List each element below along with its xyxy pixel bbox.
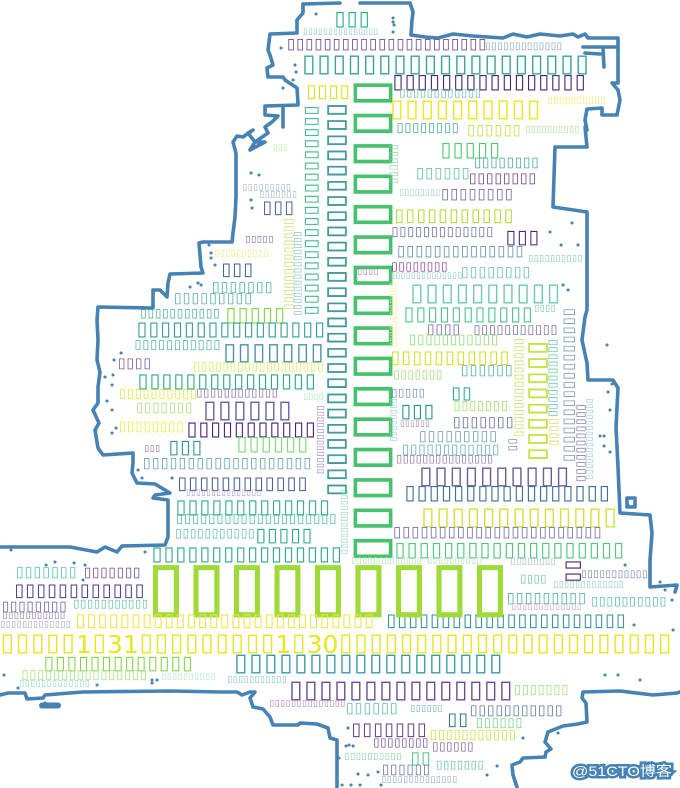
left middle words: ▯▯▯▯▯▯▯▯▯▯▯▯▯▯▯ <box>186 487 262 497</box>
central vertical words: ▯▯▯▯▯▯▯▯ <box>388 398 398 442</box>
upper and right words: ▯▯▯▯▯▯▯▯ <box>391 259 448 273</box>
left middle words: ▯▯▯▯▯▯▯▯▯▯▯▯▯▯▯▯ <box>136 317 326 340</box>
left middle words: ▯▯▯▯▯▯▯ <box>259 190 297 200</box>
upper and right words: ▯▯▯▯▯▯▯▯▯▯▯▯ <box>399 86 482 99</box>
central vertical words: ▯▯▯▯▯▯▯▯▯▯▯▯▯▯▯▯▯▯▯▯▯▯▯▯▯▯ <box>324 103 354 498</box>
upper and right words: ▯▯▯▯▯▯▯▯▯▯▯▯▯▯▯ <box>396 452 494 465</box>
upper and right words: ▯▯▯▯▯▯▯▯▯ <box>419 429 498 445</box>
left middle words: ▯▯▯ <box>262 197 295 218</box>
upper and right words: ▯▯▯▯▯ <box>391 386 426 399</box>
upper and right words: ▯▯▯▯▯▯▯▯ <box>510 556 556 567</box>
upper and right words: ▯▯▯▯▯▯▯ <box>453 415 515 431</box>
central vertical words: ▯▯▯▯▯▯▯▯ <box>526 341 554 463</box>
word: date line with digits: 31 <box>107 630 139 659</box>
lower words: ▯▯▯▯▯▯▯▯▯▯▯▯▯▯▯▯ <box>151 542 343 565</box>
upper and right words: ▯▯▯▯▯▯▯▯▯▯▯▯▯ <box>511 602 582 612</box>
upper and right words: ▯▯▯▯▯▯▯▯▯▯ <box>528 254 583 264</box>
upper and right words: ▯▯▯▯▯▯▯▯▯▯▯▯▯▯▯▯▯▯▯ <box>394 537 625 561</box>
left middle words: ▯▯▯▯▯▯▯▯▯▯▯ <box>140 306 220 320</box>
upper and right words: ▯▯▯▯▯▯▯▯▯▯▯▯▯▯▯ <box>303 26 379 36</box>
upper and right words: ▯▯▯▯▯▯▯▯▯▯▯▯▯ <box>485 41 563 52</box>
lower words: ▯▯▯▯▯▯ <box>432 739 474 753</box>
central vertical words: ▯▯▯▯▯▯▯▯▯▯▯ <box>575 404 589 482</box>
lower words: ▯▯▯▯▯▯▯▯▯▯ <box>161 672 216 682</box>
left middle words: ▯▯▯▯▯▯▯ <box>212 280 274 296</box>
upper and right words: ▯▯▯▯▯▯▯▯▯▯▯▯ <box>402 442 500 458</box>
upper and right words: ▯▯▯▯▯▯▯▯▯ <box>507 590 587 607</box>
lower words: ▯▯▯▯▯▯▯▯▯▯▯▯ <box>14 580 146 601</box>
lower words: ▯▯▯▯▯▯▯▯▯▯▯▯▯ <box>43 652 193 674</box>
lower words: ▯▯▯▯▯▯▯▯▯▯▯▯▯ <box>19 679 90 689</box>
left middle words: ▯▯▯ <box>221 259 254 280</box>
left middle words: ▯▯▯▯▯▯▯▯▯▯ <box>119 387 198 402</box>
upper and right words: ▯▯▯▯ <box>520 572 547 585</box>
central vertical words: ▯▯▯▯▯▯ <box>388 144 401 184</box>
upper and right words: ▯▯▯ <box>505 226 540 248</box>
left middle words: ▯▯▯ <box>144 444 161 454</box>
upper and right words: ▯▯▯▯▯▯▯▯▯▯▯▯▯ <box>351 556 422 566</box>
left middle words: ▯▯▯▯▯▯▯▯▯▯▯▯▯▯▯▯▯▯▯ <box>143 455 312 472</box>
central vertical words: ▯▯▯▯▯▯▯▯▯▯▯▯▯▯▯ <box>584 398 594 480</box>
upper and right words: ▯▯▯▯▯▯▯▯▯▯▯▯▯▯▯▯▯▯▯▯▯▯▯ <box>393 522 602 540</box>
upper and right words: ▯▯▯▯▯▯▯▯▯▯▯ <box>403 302 534 325</box>
lower words: ▯▯▯▯▯▯▯ <box>514 683 569 698</box>
upper and right words: ▯▯▯▯▯▯▯▯▯▯▯ <box>473 322 558 337</box>
left middle words: ▯▯▯▯▯▯▯▯▯▯▯▯ <box>177 473 309 494</box>
lower words: ▯▯ <box>447 709 469 730</box>
lower words: ▯▯▯▯▯▯▯ <box>351 719 428 740</box>
upper and right words: ▯▯▯▯▯▯▯▯▯▯▯▯▯ <box>421 502 618 530</box>
upper and right words: ▯▯▯▯▯▯▯▯ <box>461 265 531 281</box>
word: largest vertical green: ▯▯▯▯▯▯▯▯▯▯▯▯▯▯▯▯ <box>348 79 406 565</box>
central vertical words: ▯▯▯▯ <box>548 418 562 447</box>
left middle words: ▯▯▯▯ <box>303 392 324 402</box>
left middle words: ▯▯▯▯▯ <box>255 524 313 546</box>
left middle words: ▯▯▯ <box>273 143 288 153</box>
lower words: ▯▯▯▯▯▯▯▯▯▯▯ <box>73 597 149 610</box>
central vertical words: ▯▯▯▯▯▯▯▯▯▯▯▯ <box>339 489 349 555</box>
upper and right words: ▯▯▯▯▯▯▯▯▯▯▯ <box>394 205 515 226</box>
left middle words: ▯▯▯ <box>168 436 203 458</box>
upper and right words: ▯▯▯▯▯▯▯▯▯▯ <box>390 94 542 122</box>
lower words: ▯▯▯▯▯▯▯▯▯▯▯▯▯ <box>0 620 71 630</box>
upper and right words <box>287 6 667 631</box>
upper and right words: ▯▯▯▯▯▯▯▯▯▯▯▯▯ <box>553 580 624 590</box>
left middle words: ▯▯▯▯▯▯ <box>203 395 293 424</box>
upper and right words: ▯▯▯▯▯▯▯▯▯▯▯▯▯▯ <box>390 271 462 281</box>
upper and right words: ▯▯▯▯▯▯▯▯▯▯ <box>547 95 606 106</box>
lower words: ▯▯▯▯▯▯▯▯▯▯▯ <box>430 728 517 743</box>
lower words: ▯▯▯▯▯▯ <box>410 704 443 714</box>
upper and right words: ▯▯▯▯▯▯▯▯▯▯ <box>410 278 562 306</box>
central vertical words: ▯▯▯▯▯▯▯▯▯▯▯▯▯▯ <box>292 231 303 316</box>
central vertical words: ▯▯▯▯▯▯▯▯▯▯▯▯▯▯ <box>513 338 527 438</box>
central vertical words: ▯▯▯▯▯▯▯▯▯▯▯▯ <box>388 282 398 348</box>
central vertical words: ▯▯▯▯▯▯▯▯▯▯▯▯ <box>315 405 326 474</box>
word: date line with digits: ▯ <box>92 628 108 656</box>
upper and right words: ▯▯▯▯▯▯ <box>461 363 514 379</box>
left middle words: ▯▯▯▯▯▯ <box>236 431 309 455</box>
upper and right words: ▯▯▯▯▯▯▯▯ <box>399 188 441 198</box>
upper and right words: ▯▯▯▯▯▯ <box>416 164 471 182</box>
lower words: ▯▯▯▯▯▯▯▯ <box>373 735 429 749</box>
lower words: ▯▯▯▯▯▯ <box>382 762 431 778</box>
upper and right words: ▯▯ <box>451 383 473 403</box>
central vertical words <box>283 79 594 584</box>
left middle words: ▯▯▯▯▯▯▯▯▯▯▯▯ <box>196 386 279 399</box>
lower words: ▯▯▯▯▯▯▯▯▯▯▯ <box>470 703 563 719</box>
upper and right words: ▯▯▯▯ <box>306 81 351 102</box>
upper and right words: ▯▯▯▯▯▯ <box>400 418 430 428</box>
lower words: ▯▯▯▯▯▯▯▯ <box>2 599 67 615</box>
upper and right words: ▯▯▯▯▯▯▯▯ <box>469 171 537 187</box>
word: date line with digits: ▯▯▯▯▯▯▯▯▯▯▯▯▯▯▯▯▯▯▯▯▯▯ <box>339 628 673 656</box>
left middle words: ▯▯▯▯ <box>118 356 152 372</box>
upper and right words: ▯▯▯▯▯▯▯▯▯▯▯▯▯▯▯▯ <box>392 69 587 93</box>
left middle words <box>118 143 337 546</box>
word: largest horizontal green-yellow: ▯▯▯▯▯▯▯▯▯ <box>148 546 512 624</box>
left middle words: ▯▯▯▯▯▯▯▯▯ <box>242 183 291 193</box>
left middle words: ▯▯▯▯▯▯▯▯▯▯ <box>214 249 269 259</box>
upper and right words: ▯▯▯▯ <box>357 267 379 277</box>
lower words: ▯▯▯▯▯▯▯▯▯▯▯ <box>227 675 287 685</box>
left middle words: ▯▯▯▯▯ <box>245 234 274 245</box>
upper and right words: ▯▯▯ <box>400 400 435 422</box>
central vertical words: ▯▯▯▯▯▯▯▯▯▯▯▯▯▯▯▯▯▯▯ <box>302 105 323 316</box>
upper and right words: ▯▯▯▯▯▯▯ <box>393 367 443 381</box>
upper and right words: ▯▯▯▯ <box>427 322 461 338</box>
word: date line with digits: ▯▯▯▯▯ <box>1 628 77 656</box>
upper and right words: ▯▯▯▯▯▯▯ <box>453 399 509 414</box>
central vertical words: ▯▯ <box>563 560 587 584</box>
central vertical words: ▯▯▯▯▯▯▯▯▯▯▯▯▯▯▯▯▯ <box>562 308 580 463</box>
watermark: @51CTO博客 <box>572 763 672 779</box>
upper and right words: ▯▯▯▯▯▯▯▯▯▯▯▯▯▯▯▯▯▯▯ <box>302 48 591 78</box>
lower words: ▯▯▯▯▯▯ <box>346 701 399 717</box>
lower words: ▯▯ <box>410 748 432 768</box>
lower words: ▯▯▯▯▯▯▯▯▯▯▯▯▯▯▯▯▯▯▯▯▯▯▯▯▯▯▯ <box>75 610 375 631</box>
word: date line with digits: 1 <box>76 630 92 659</box>
left middle words: ▯▯▯▯▯▯▯▯▯▯▯ <box>134 338 221 353</box>
left middle words: ▯▯▯▯▯ <box>226 302 286 326</box>
upper and right words: ▯▯▯▯▯▯▯▯▯▯▯▯▯▯▯▯▯▯▯▯▯▯ <box>287 34 487 52</box>
upper and right words: ▯▯▯▯▯▯▯▯▯▯▯ <box>581 569 648 580</box>
central vertical words: ▯▯▯▯▯▯▯▯▯▯▯▯▯ <box>283 218 297 311</box>
upper and right words: ▯▯▯▯▯▯▯▯ <box>441 184 514 202</box>
upper and right words: ▯▯▯▯▯▯▯▯ <box>396 121 459 136</box>
lower words: ▯▯▯▯▯▯▯▯▯▯▯▯▯▯▯ <box>289 675 514 704</box>
lower words: ▯▯▯▯▯▯▯▯▯▯▯▯▯▯▯▯ <box>21 668 148 683</box>
lower words: ▯▯▯▯▯▯▯▯▯▯▯▯▯▯▯▯▯▯ <box>234 648 504 677</box>
upper and right words: ▯▯▯▯▯▯▯▯▯▯▯ <box>390 347 511 368</box>
lower words: ▯▯▯▯▯▯▯▯▯▯ <box>344 751 402 762</box>
lower words: ▯▯▯▯▯▯ <box>476 716 523 731</box>
left middle words: ▯▯▯▯▯▯▯▯▯▯▯ <box>175 526 255 540</box>
word: date line with digits: ▯▯▯▯▯▯▯▯▯ <box>139 628 276 656</box>
lower words: ▯▯▯▯▯▯▯▯▯▯▯▯▯▯ <box>381 775 458 785</box>
upper and right words: ▯▯▯▯ <box>534 304 556 314</box>
lower words: ▯▯▯▯▯▯▯ <box>436 758 484 771</box>
left middle words: ▯▯▯▯▯▯▯▯▯ <box>174 291 253 307</box>
upper and right words: ▯▯▯▯▯▯▯▯▯▯ <box>591 593 667 608</box>
lower words <box>0 542 673 785</box>
left middle words: ▯▯▯▯▯▯▯▯▯▯▯▯▯▯▯ <box>137 369 317 392</box>
upper and right words: ▯▯▯▯▯▯▯▯ <box>474 155 539 171</box>
upper and right words: ▯▯▯▯▯▯▯▯▯▯▯▯▯▯▯▯▯▯▯▯▯▯ <box>386 610 627 631</box>
left middle words: ▯▯▯▯▯▯▯▯▯▯▯▯▯ <box>175 495 331 518</box>
lower words: ▯▯▯▯▯▯▯ <box>84 565 141 581</box>
upper and right words: ▯▯▯▯▯▯▯▯▯▯ <box>525 125 580 135</box>
left middle words: ▯▯▯▯▯▯▯▯▯▯▯ <box>186 417 317 440</box>
upper and right words: ▯▯▯▯▯▯▯▯▯▯▯▯▯ <box>391 225 494 240</box>
left middle words: ▯▯▯▯▯▯▯▯ <box>119 419 184 435</box>
central vertical words: ▯▯▯▯▯▯▯▯▯▯▯ <box>547 339 561 417</box>
word: date line with digits: ▯ <box>292 628 307 656</box>
left middle words: ▯▯▯▯▯▯▯ <box>136 400 193 416</box>
upper and right words: ▯▯▯▯▯▯▯▯▯▯▯▯▯▯ <box>397 242 524 260</box>
left middle words: ▯▯▯▯▯▯▯▯▯▯▯▯▯▯▯▯▯▯▯▯ <box>176 512 337 527</box>
left middle words: ▯▯▯▯▯▯▯▯▯▯▯▯▯▯▯▯▯▯ <box>193 359 324 373</box>
left middle words: ▯▯▯▯▯▯▯ <box>223 338 325 366</box>
upper and right words: ▯▯▯ <box>334 6 371 30</box>
word: date line with digits: 1 <box>276 630 291 659</box>
lower words: ▯▯▯▯▯▯▯▯▯▯▯▯▯▯ <box>269 699 346 709</box>
lower words: ▯▯▯▯▯▯▯ <box>16 565 78 581</box>
upper and right words: ▯▯▯▯▯▯▯▯▯▯▯▯▯▯▯▯▯ <box>404 480 611 504</box>
word: date line with digits: 30 <box>307 630 338 659</box>
upper and right words: ▯▯▯▯▯▯▯▯▯▯ <box>419 460 571 490</box>
upper and right words: ▯▯▯▯▯ <box>440 137 501 161</box>
lower words: ▯▯▯▯▯▯▯▯▯▯▯ <box>2 610 66 621</box>
upper and right words: ▯▯▯▯▯▯▯▯▯▯▯ <box>409 332 499 348</box>
central vertical words: ▯▯ <box>507 438 520 452</box>
upper and right words: ▯▯▯▯▯▯ <box>467 120 522 138</box>
upper and right words: ▯▯▯▯▯▯▯▯▯▯ <box>427 556 482 566</box>
